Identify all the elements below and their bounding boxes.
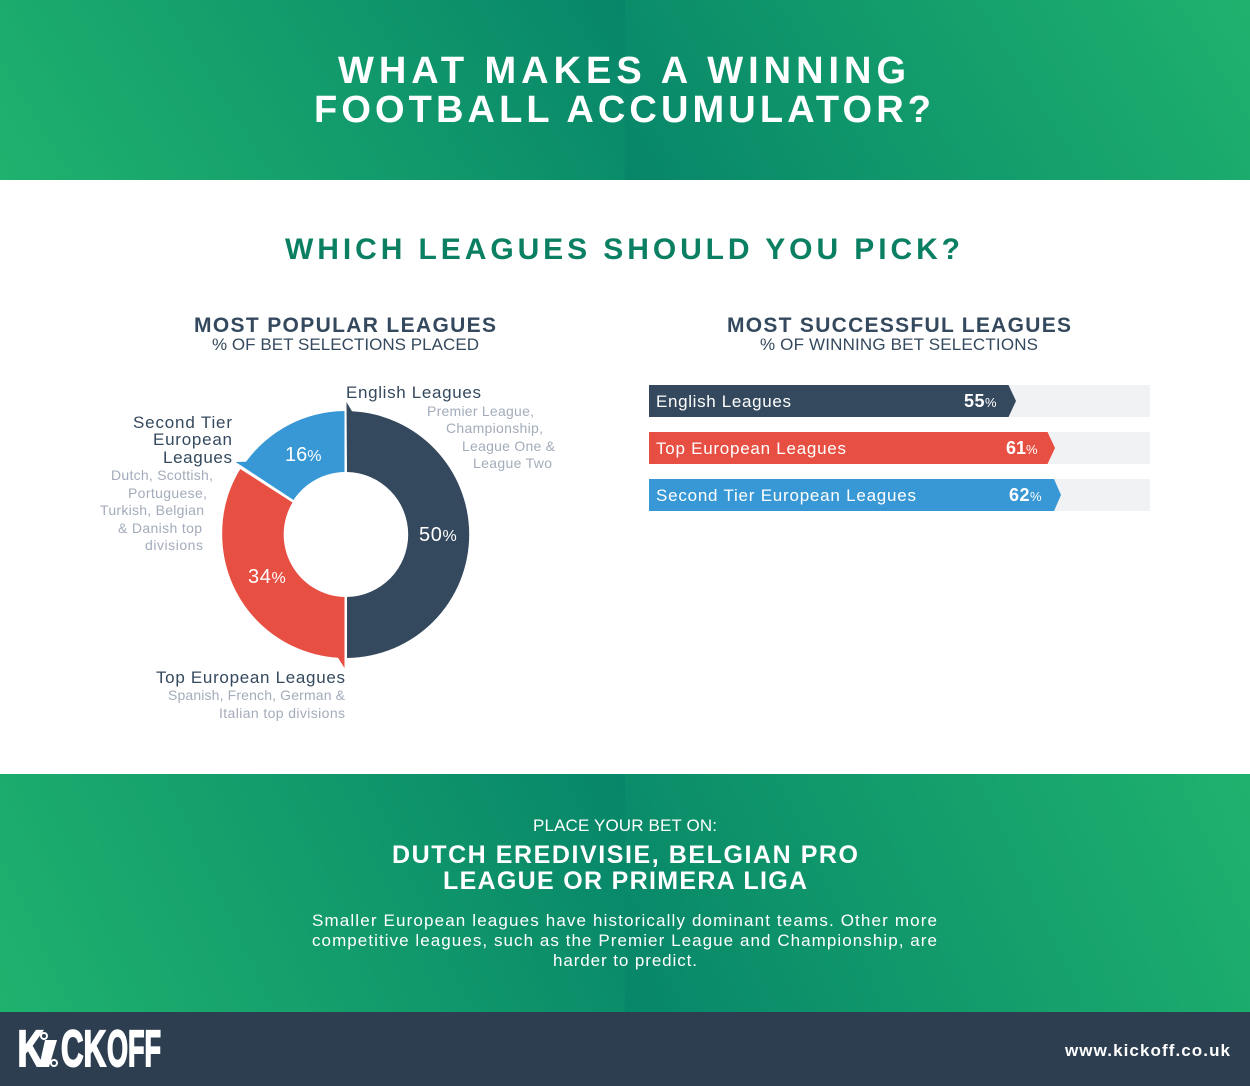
label: second tier European leagues [100, 413, 232, 553]
recommendation banner [0, 774, 1250, 1012]
recommendation body text: Smaller European leagues have historically dominant teams. Other more [312, 911, 937, 930]
segment: second tier European leagues 16% [236, 411, 344, 500]
label: second tier European leagues: European [153, 430, 232, 449]
bar: second tier European leagues 62%: Second Tier European Leagues [656, 486, 916, 505]
label: second tier European leagues: Dutch, Scottish, [111, 467, 213, 483]
panel heading: most successful leagues [727, 314, 1071, 354]
value: 34%: 34% [248, 566, 286, 588]
segment: top European leagues 34% [222, 469, 344, 668]
recommendation heading: DUTCH EREDIVISIE, BELGIAN PRO [392, 841, 858, 869]
label: top European leagues: Spanish, French, German & [168, 687, 346, 703]
logo: Kick Off: K [18, 1020, 44, 1077]
label: English leagues: Premier League, [427, 403, 534, 419]
label: top European leagues: Top European Leagues [156, 668, 345, 687]
label: English leagues: League One & [462, 438, 556, 454]
label: second tier European leagues: divisions [145, 537, 203, 553]
value: 16%: 16% [285, 444, 321, 466]
bar: top European leagues 61% [649, 432, 1150, 464]
label: second tier European leagues: Second Tier [133, 413, 232, 432]
segment: English leagues 50% [346, 402, 469, 658]
panel heading: most successful leagues: % OF WINNING BET SELECTIONS [760, 335, 1038, 354]
website url: www.kickoff.co.uk [1064, 1041, 1231, 1060]
logo: Kick Off [18, 1020, 161, 1077]
value: 50%: 50% [419, 524, 457, 546]
panel heading: most successful leagues: MOST SUCCESSFUL LEAGUES [727, 314, 1071, 337]
logo: Kick Off: OFF [107, 1020, 161, 1077]
bar: top European leagues 61%: Top European Leagues [656, 439, 846, 458]
logo: Kick Off: CK [61, 1020, 106, 1077]
header banner [0, 0, 1250, 180]
recommendation body text: competitive leagues, such as the Premier League and Championship, are [312, 931, 937, 950]
bar: English leagues 55%: English Leagues [656, 392, 791, 411]
label: top European leagues [156, 668, 346, 721]
label: second tier European leagues: & Danish top [118, 520, 202, 536]
recommendation body text [312, 911, 937, 970]
section heading: WHICH LEAGUES SHOULD YOU PICK? [285, 233, 960, 266]
label: English leagues: Championship, [446, 420, 543, 436]
kicker: PLACE YOUR BET ON: [533, 816, 717, 835]
bar: second tier European leagues 62%: 62% [1009, 485, 1042, 505]
donut chart [222, 402, 469, 668]
label: second tier European leagues: Leagues [163, 448, 232, 467]
label: second tier European leagues: Portuguese, [128, 485, 207, 501]
title: FOOTBALL ACCUMULATOR? [314, 89, 931, 131]
bar: English leagues 55% [649, 385, 1150, 417]
title: WHAT MAKES A WINNING [338, 50, 906, 92]
bar: English leagues 55%: 55% [964, 391, 997, 411]
label: English leagues: English Leagues [346, 383, 481, 402]
panel heading: most popular leagues: % OF BET SELECTIONS PLACED [212, 335, 479, 354]
panel heading: most popular leagues: MOST POPULAR LEAGUES [194, 314, 496, 337]
recommendation heading: LEAGUE OR PRIMERA LIGA [443, 867, 807, 895]
footer bar [0, 1012, 1250, 1086]
recommendation body text: harder to predict. [553, 951, 697, 970]
title [314, 50, 931, 131]
label: top European leagues: Italian top divisions [219, 705, 345, 721]
label: English leagues: League Two [473, 455, 552, 471]
bar chart [649, 385, 1150, 511]
bar: top European leagues 61%: 61% [1006, 438, 1038, 458]
label: second tier European leagues: Turkish, Belgian [100, 502, 204, 518]
label: English leagues [346, 383, 556, 471]
recommendation heading [392, 841, 858, 895]
panel heading: most popular leagues [194, 314, 496, 354]
bar: second tier European leagues 62% [649, 479, 1150, 511]
